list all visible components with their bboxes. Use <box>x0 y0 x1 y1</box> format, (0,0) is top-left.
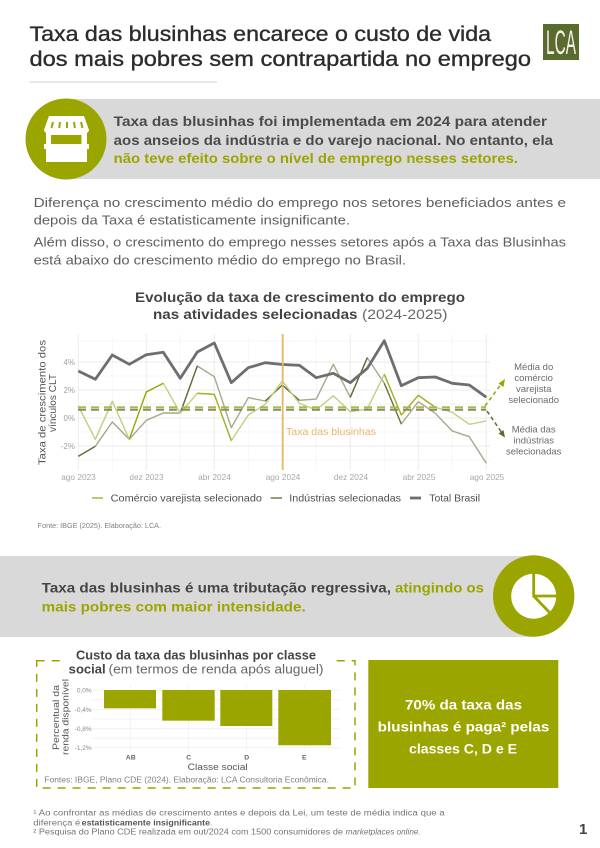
source note: Fonte: IBGE (2025). Elaboração: LCA. <box>38 523 161 530</box>
bar chart: cost by social class: E <box>302 754 307 762</box>
text block: intro paragraphs: Além disso, o crescimento do emprego nesses setores após a Taxa das Blusinhas <box>34 235 566 250</box>
label: média do comércio: Média do <box>514 362 553 373</box>
bar chart: cost by social class: -1,2% <box>75 745 92 752</box>
x axis labels: ago 2023 <box>61 472 96 482</box>
text block: intro paragraphs <box>34 195 566 267</box>
label: média do comércio: comércio <box>514 373 553 384</box>
callout text: aos anseios da indústria e do varejo nacional. No entanto, ela <box>114 133 553 148</box>
panel: 70% callout <box>368 660 558 788</box>
bar chart: cost by social class: 0,0% <box>77 688 92 694</box>
callout text: não teve efeito sobre o nível de emprego nesses setores. <box>114 151 518 166</box>
icon: pie chart <box>493 555 574 637</box>
heading: bar chart title: Custo da taxa das blusinhas por classe <box>76 648 316 662</box>
panel: 70% callout: classes C, D e E <box>409 741 517 756</box>
bar chart: cost by social class: AB <box>126 754 136 762</box>
heading: bar chart title: (em termos de renda após aluguel) <box>108 662 324 676</box>
bar chart: cost by social class: -0,8% <box>75 726 92 733</box>
heading: bar chart title: social <box>69 662 106 676</box>
x axis labels: abr 2024 <box>198 472 231 482</box>
series: indústrias selecionadas <box>78 358 486 463</box>
callout text <box>42 579 484 615</box>
logo: LCA <box>543 24 579 62</box>
callout text: Taxa das blusinhas foi implementada em 2024 para atender <box>114 114 548 129</box>
label: média do comércio <box>508 362 559 406</box>
footnotes: marketplaces online. <box>346 827 421 836</box>
bar chart: cost by social class: Percentual da <box>51 684 61 750</box>
vertical marker: taxa das blusinhas: Taxa das blusinhas <box>286 427 376 438</box>
series: comércio varejista selecionado <box>78 374 486 441</box>
bar chart: cost by social class: -0,4% <box>75 707 92 714</box>
y axis labels <box>61 358 75 451</box>
arrow: média indústrias <box>487 411 505 438</box>
label: média do comércio: varejista <box>516 384 552 395</box>
y axis labels: -2% <box>61 442 75 451</box>
series: total Brasil <box>78 341 486 397</box>
panel: implementation callout <box>26 98 600 180</box>
callout text <box>114 114 553 166</box>
y axis labels: 0% <box>63 414 75 423</box>
bar chart: cost by social class: D <box>244 754 249 762</box>
x axis labels <box>61 472 505 482</box>
label: média do comércio: selecionado <box>508 395 559 406</box>
bar chart: cost by social class: Classe social <box>188 762 248 772</box>
label: média das indústrias <box>506 425 562 458</box>
arrow: média comércio <box>485 379 505 406</box>
legend <box>92 494 480 505</box>
y axis title: Taxa de crescimento dos <box>38 340 48 465</box>
footnotes: ¹ Ao confrontar as médias de crescimento antes e depois da Lei, um teste de média indica que a <box>33 809 445 818</box>
callout text: Taxa das blusinhas é uma tributação regressiva, <box>42 579 391 595</box>
text block: intro paragraphs: Diferença no crescimento médio do emprego nos setores beneficiados antes e <box>34 195 566 210</box>
x axis labels: dez 2023 <box>129 472 164 482</box>
panel: bar chart box <box>37 648 355 788</box>
bar chart: cost by social class: C <box>186 754 191 762</box>
label: média das indústrias: selecionadas <box>506 447 562 458</box>
page number: 1 <box>579 821 587 838</box>
y axis title: vínculos CLT <box>48 374 59 432</box>
x axis labels: dez 2024 <box>334 472 368 482</box>
footnotes <box>33 809 445 836</box>
label: média das indústrias: Média das <box>512 425 556 436</box>
x axis labels: ago 2024 <box>266 472 301 482</box>
panel: regressive tax callout <box>0 555 574 637</box>
x axis labels: ago 2025 <box>470 472 505 482</box>
y axis labels: 4% <box>63 358 75 367</box>
heading: line chart title: (2024-2025) <box>362 306 448 322</box>
source note: Fontes: IBGE, Plano CDE (2024). Elaboração: LCA Consultoria Econômica. <box>44 776 329 785</box>
heading: line chart title: nas atividades selecionadas <box>153 306 358 322</box>
heading: bar chart title <box>69 648 324 676</box>
heading: line chart title <box>135 289 465 322</box>
title: dos mais pobres sem contrapartida no emprego <box>30 48 531 71</box>
vertical marker: taxa das blusinhas <box>283 334 376 470</box>
panel: 70% callout: blusinhas é paga² pelas <box>378 719 549 734</box>
legend: Indústrias selecionadas <box>289 494 401 505</box>
title <box>30 23 531 71</box>
callout text: mais pobres com maior intensidade. <box>42 599 306 615</box>
legend: Comércio varejista selecionado <box>111 494 262 505</box>
icon: storefront <box>26 98 106 180</box>
y axis title <box>38 340 59 465</box>
title: Taxa das blusinhas encarece o custo de vida <box>30 23 491 46</box>
legend: Total Brasil <box>429 494 480 505</box>
label: média das indústrias: indústrias <box>513 436 554 447</box>
footnotes: . <box>210 819 212 828</box>
callout text: atingindo os <box>395 579 484 595</box>
text block: intro paragraphs: depois da Taxa é estatisticamente insignificante. <box>34 212 350 228</box>
footnotes: diferença é <box>33 819 81 828</box>
footnotes: ² Pesquisa do Plano CDE realizada em out/2024 com 1500 consumidores de <box>33 827 344 836</box>
bar chart: cost by social class <box>51 679 340 772</box>
text block: intro paragraphs: está abaixo do crescimento médio do emprego no Brasil. <box>34 252 406 267</box>
x axis labels: abr 2025 <box>403 472 436 482</box>
average lines <box>78 407 486 410</box>
footnotes: estatisticamente insignificante <box>82 819 211 828</box>
panel: 70% callout: 70% da taxa das <box>405 697 522 712</box>
line chart: employment growth <box>38 334 562 482</box>
heading: line chart title: Evolução da taxa de crescimento do emprego <box>135 289 465 305</box>
y axis labels: 2% <box>63 386 75 395</box>
bar chart: cost by social class: renda disponível <box>61 679 71 755</box>
